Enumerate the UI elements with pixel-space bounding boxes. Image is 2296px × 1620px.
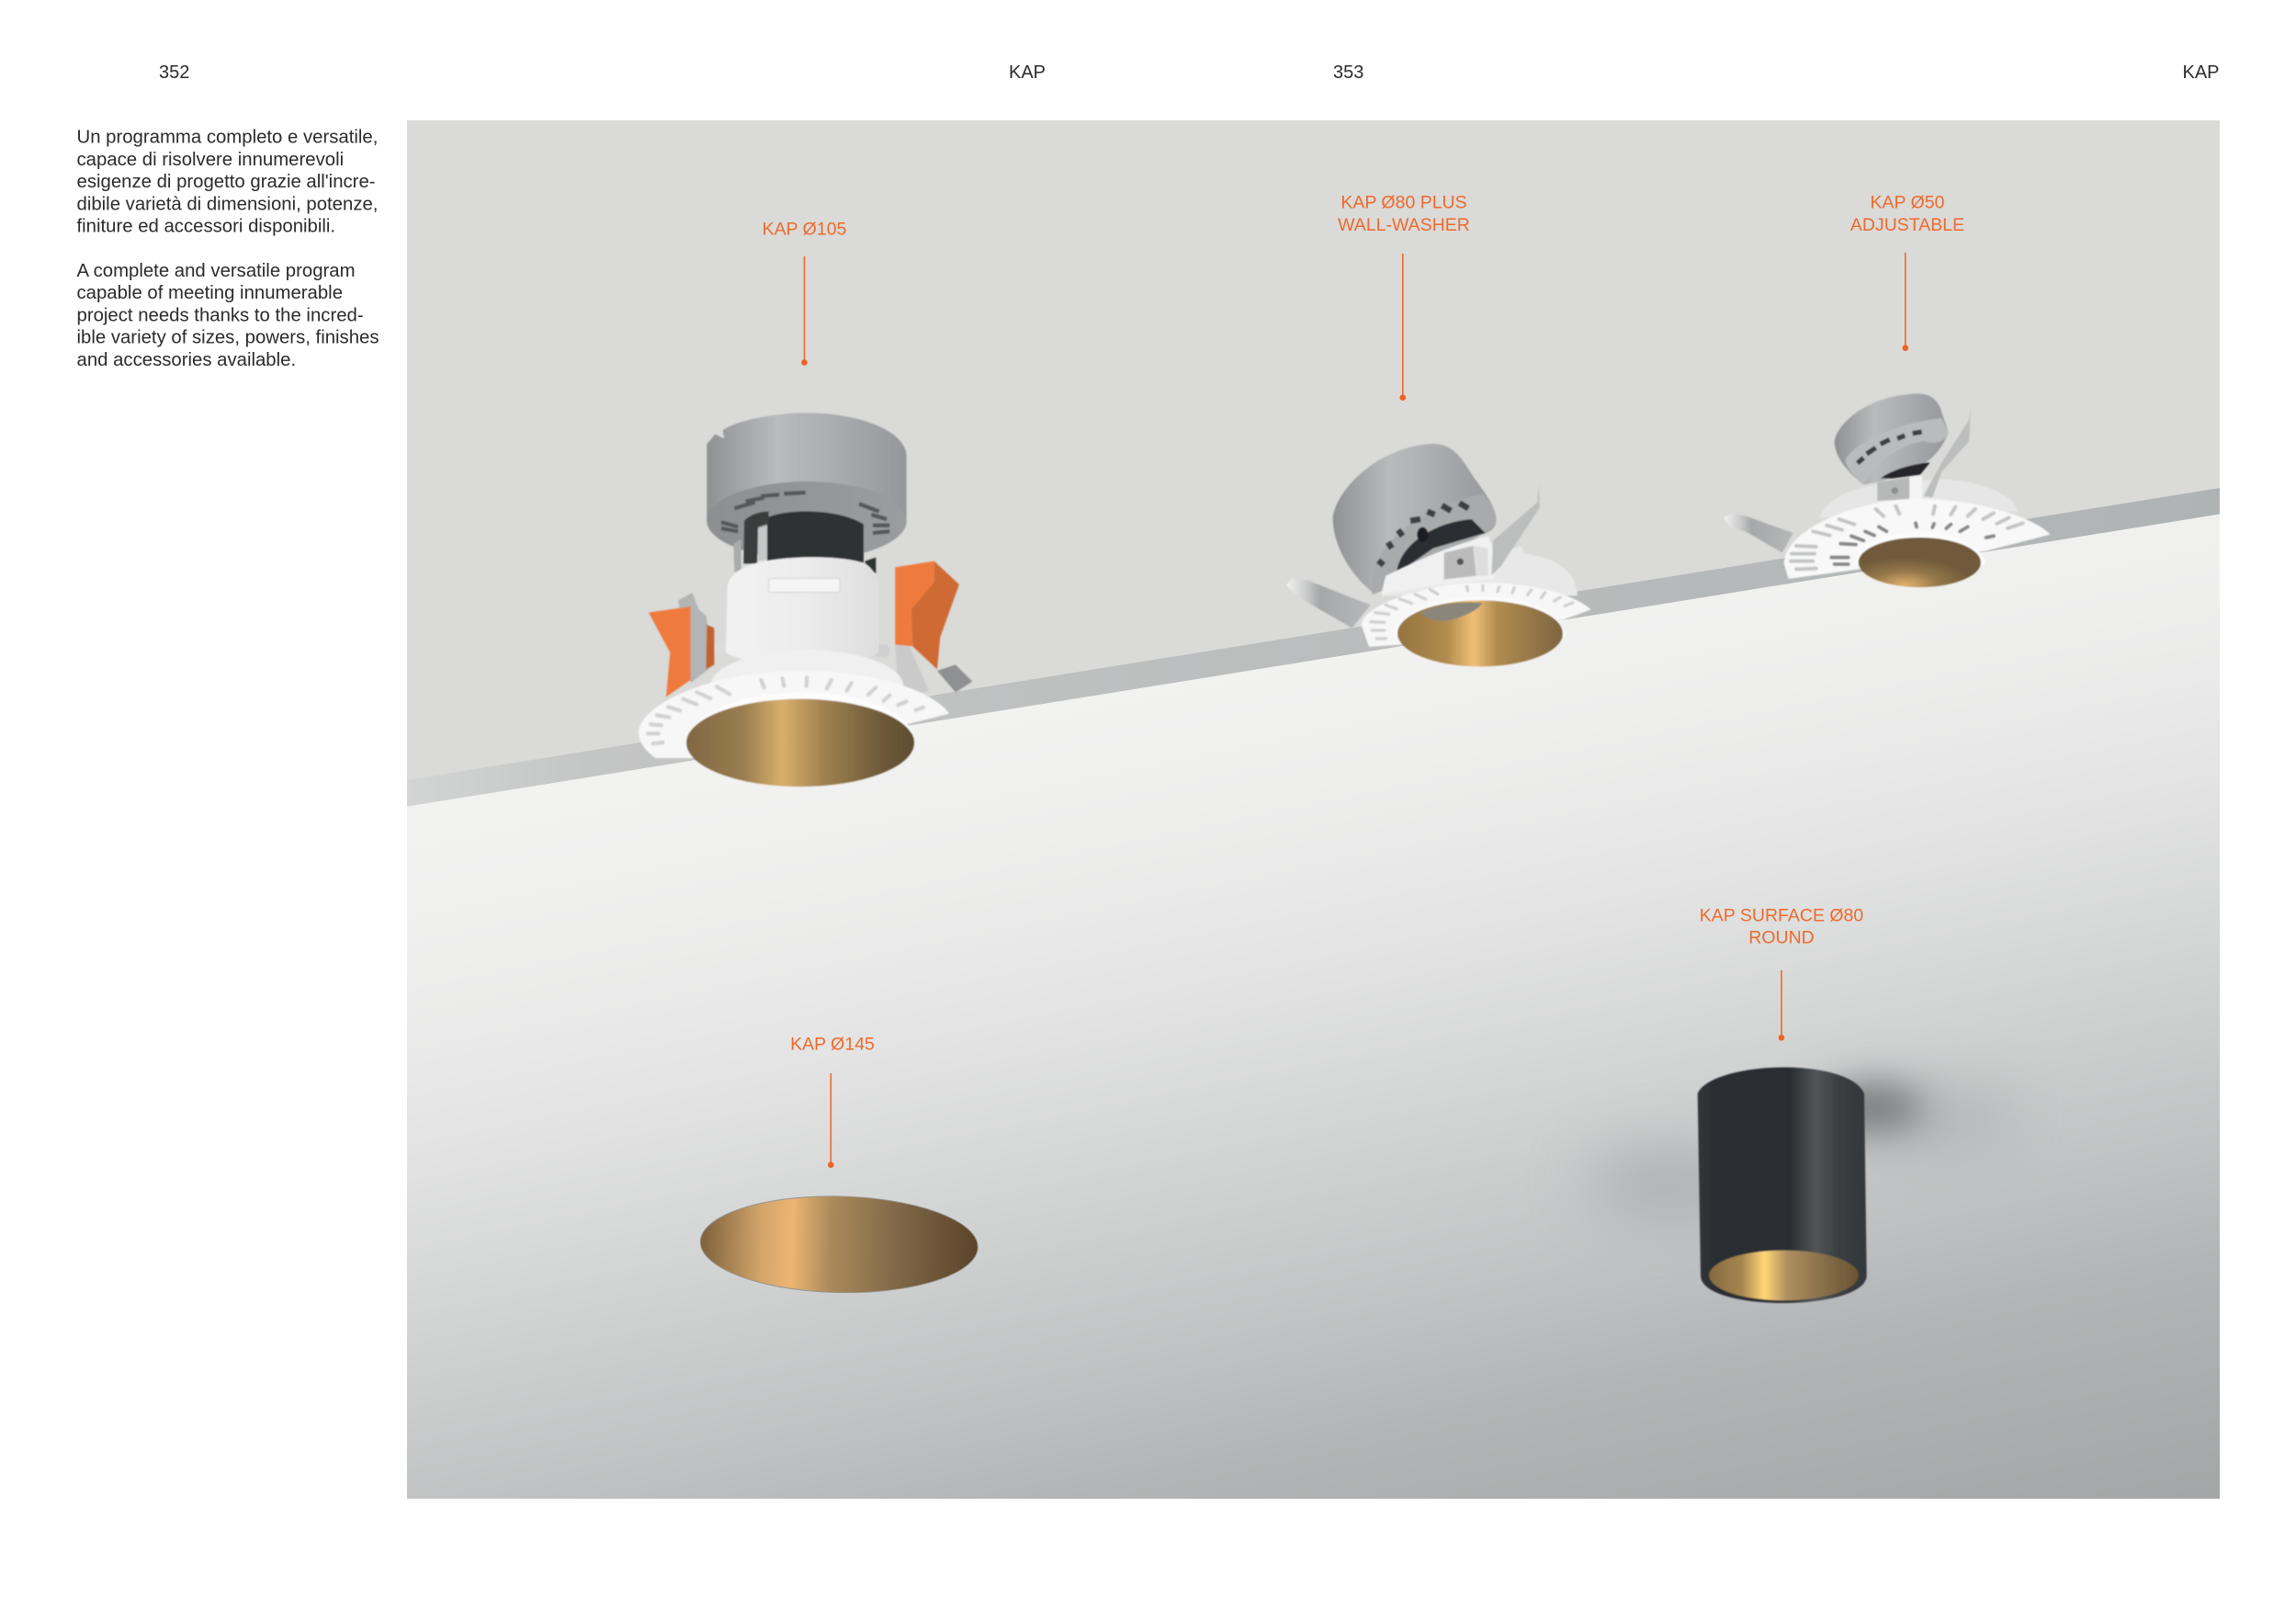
trim dome: [710, 650, 903, 722]
English paragraph: ible variety of sizes, powers, finishes: [77, 328, 379, 348]
page header: left section name: KAP: [1009, 62, 1046, 83]
Italian paragraph: esigenze di progetto grazie all'incre-: [77, 172, 376, 192]
product: KAP diameter 80 plus wall-washer: [1286, 444, 1591, 666]
callout: KAP diameter 80 plus wall-washer: WALL-WASHER: [1338, 215, 1470, 235]
trim dome: [1819, 480, 2019, 517]
slotted trim ring: [1784, 499, 2051, 583]
ceiling plane: [407, 515, 2220, 1499]
right spring fin: [1491, 484, 1540, 575]
English paragraph: and accessories available.: [77, 350, 296, 370]
callout: KAP diameter 80 plus wall-washer: KAP Ø80 PLUS: [1340, 193, 1467, 213]
left spring strap: [1724, 513, 1793, 553]
page header: right section name: KAP: [2183, 62, 2220, 83]
gold inner reflector: [1709, 1250, 1859, 1301]
gold reflector: [1397, 600, 1563, 666]
intro text block: [77, 128, 379, 370]
slotted trim ring: [639, 671, 949, 760]
callout: KAP Surface diameter 80 round: KAP SURFACE Ø80: [1700, 906, 1863, 926]
callout: KAP diameter 50 adjustable: [1850, 193, 1964, 351]
callout: KAP diameter 145: KAP Ø145: [790, 1035, 875, 1055]
visible LED module: [1420, 603, 1482, 621]
gold reflector: [1859, 538, 1981, 587]
black cylinder: [1698, 1068, 1867, 1303]
mounting bracket: [1877, 475, 1922, 501]
slotted trim ring: [1362, 583, 1591, 647]
callout: KAP diameter 50 adjustable: KAP Ø50: [1871, 193, 1945, 213]
product: KAP diameter 145 recessed gold reflector: [699, 1194, 978, 1296]
soft shadows on ceiling: [1585, 1085, 2021, 1212]
left spring strap: [1286, 578, 1371, 628]
right spring fin: [1923, 407, 1971, 498]
product: KAP diameter 50 adjustable: [1724, 393, 2051, 587]
English paragraph: A complete and versatile program: [77, 261, 356, 281]
callout: KAP diameter 105: [763, 219, 847, 366]
ceiling edge strip: [407, 488, 2220, 807]
wall background: [407, 120, 2220, 1499]
Italian paragraph: Un programma completo e versatile,: [77, 128, 378, 148]
callout: KAP diameter 80 plus wall-washer: [1338, 193, 1470, 401]
main image panel: wall and ceiling scene: [407, 120, 2220, 1499]
callout: KAP Surface diameter 80 round: [1700, 906, 1863, 1041]
white collar and bracket: [1381, 536, 1495, 595]
heat sink drum: [707, 413, 907, 573]
Italian paragraph: capace di risolvere innumerevoli: [77, 150, 344, 170]
gold reflector: [686, 699, 914, 787]
page header: right page number: 353: [1333, 62, 1363, 83]
left orange clip: [649, 593, 714, 697]
callout: KAP diameter 145: [790, 1035, 875, 1168]
English paragraph: project needs thanks to the incred-: [77, 305, 364, 325]
Italian paragraph: [77, 128, 378, 237]
tilted heat sink drum: [1835, 393, 1949, 484]
callout: KAP diameter 50 adjustable: ADJUSTABLE: [1850, 215, 1964, 235]
tilted heat sink drum: [1333, 444, 1496, 595]
right orange clip: [895, 561, 972, 692]
Italian paragraph: dibile varietà di dimensioni, potenze,: [77, 194, 378, 214]
page header: left page number: 352: [159, 62, 189, 83]
trim dome: [1381, 546, 1578, 595]
product: KAP diameter 105 with clips: [639, 413, 972, 787]
English paragraph: capable of meeting innumerable: [77, 283, 343, 303]
white body: [715, 557, 889, 665]
callout: KAP diameter 105: KAP Ø105: [763, 219, 847, 239]
English paragraph: [77, 261, 379, 370]
product: KAP Surface diameter 80 round: [1585, 1068, 2021, 1303]
callout: KAP Surface diameter 80 round: ROUND: [1748, 928, 1815, 948]
Italian paragraph: finiture ed accessori disponibili.: [77, 217, 335, 237]
